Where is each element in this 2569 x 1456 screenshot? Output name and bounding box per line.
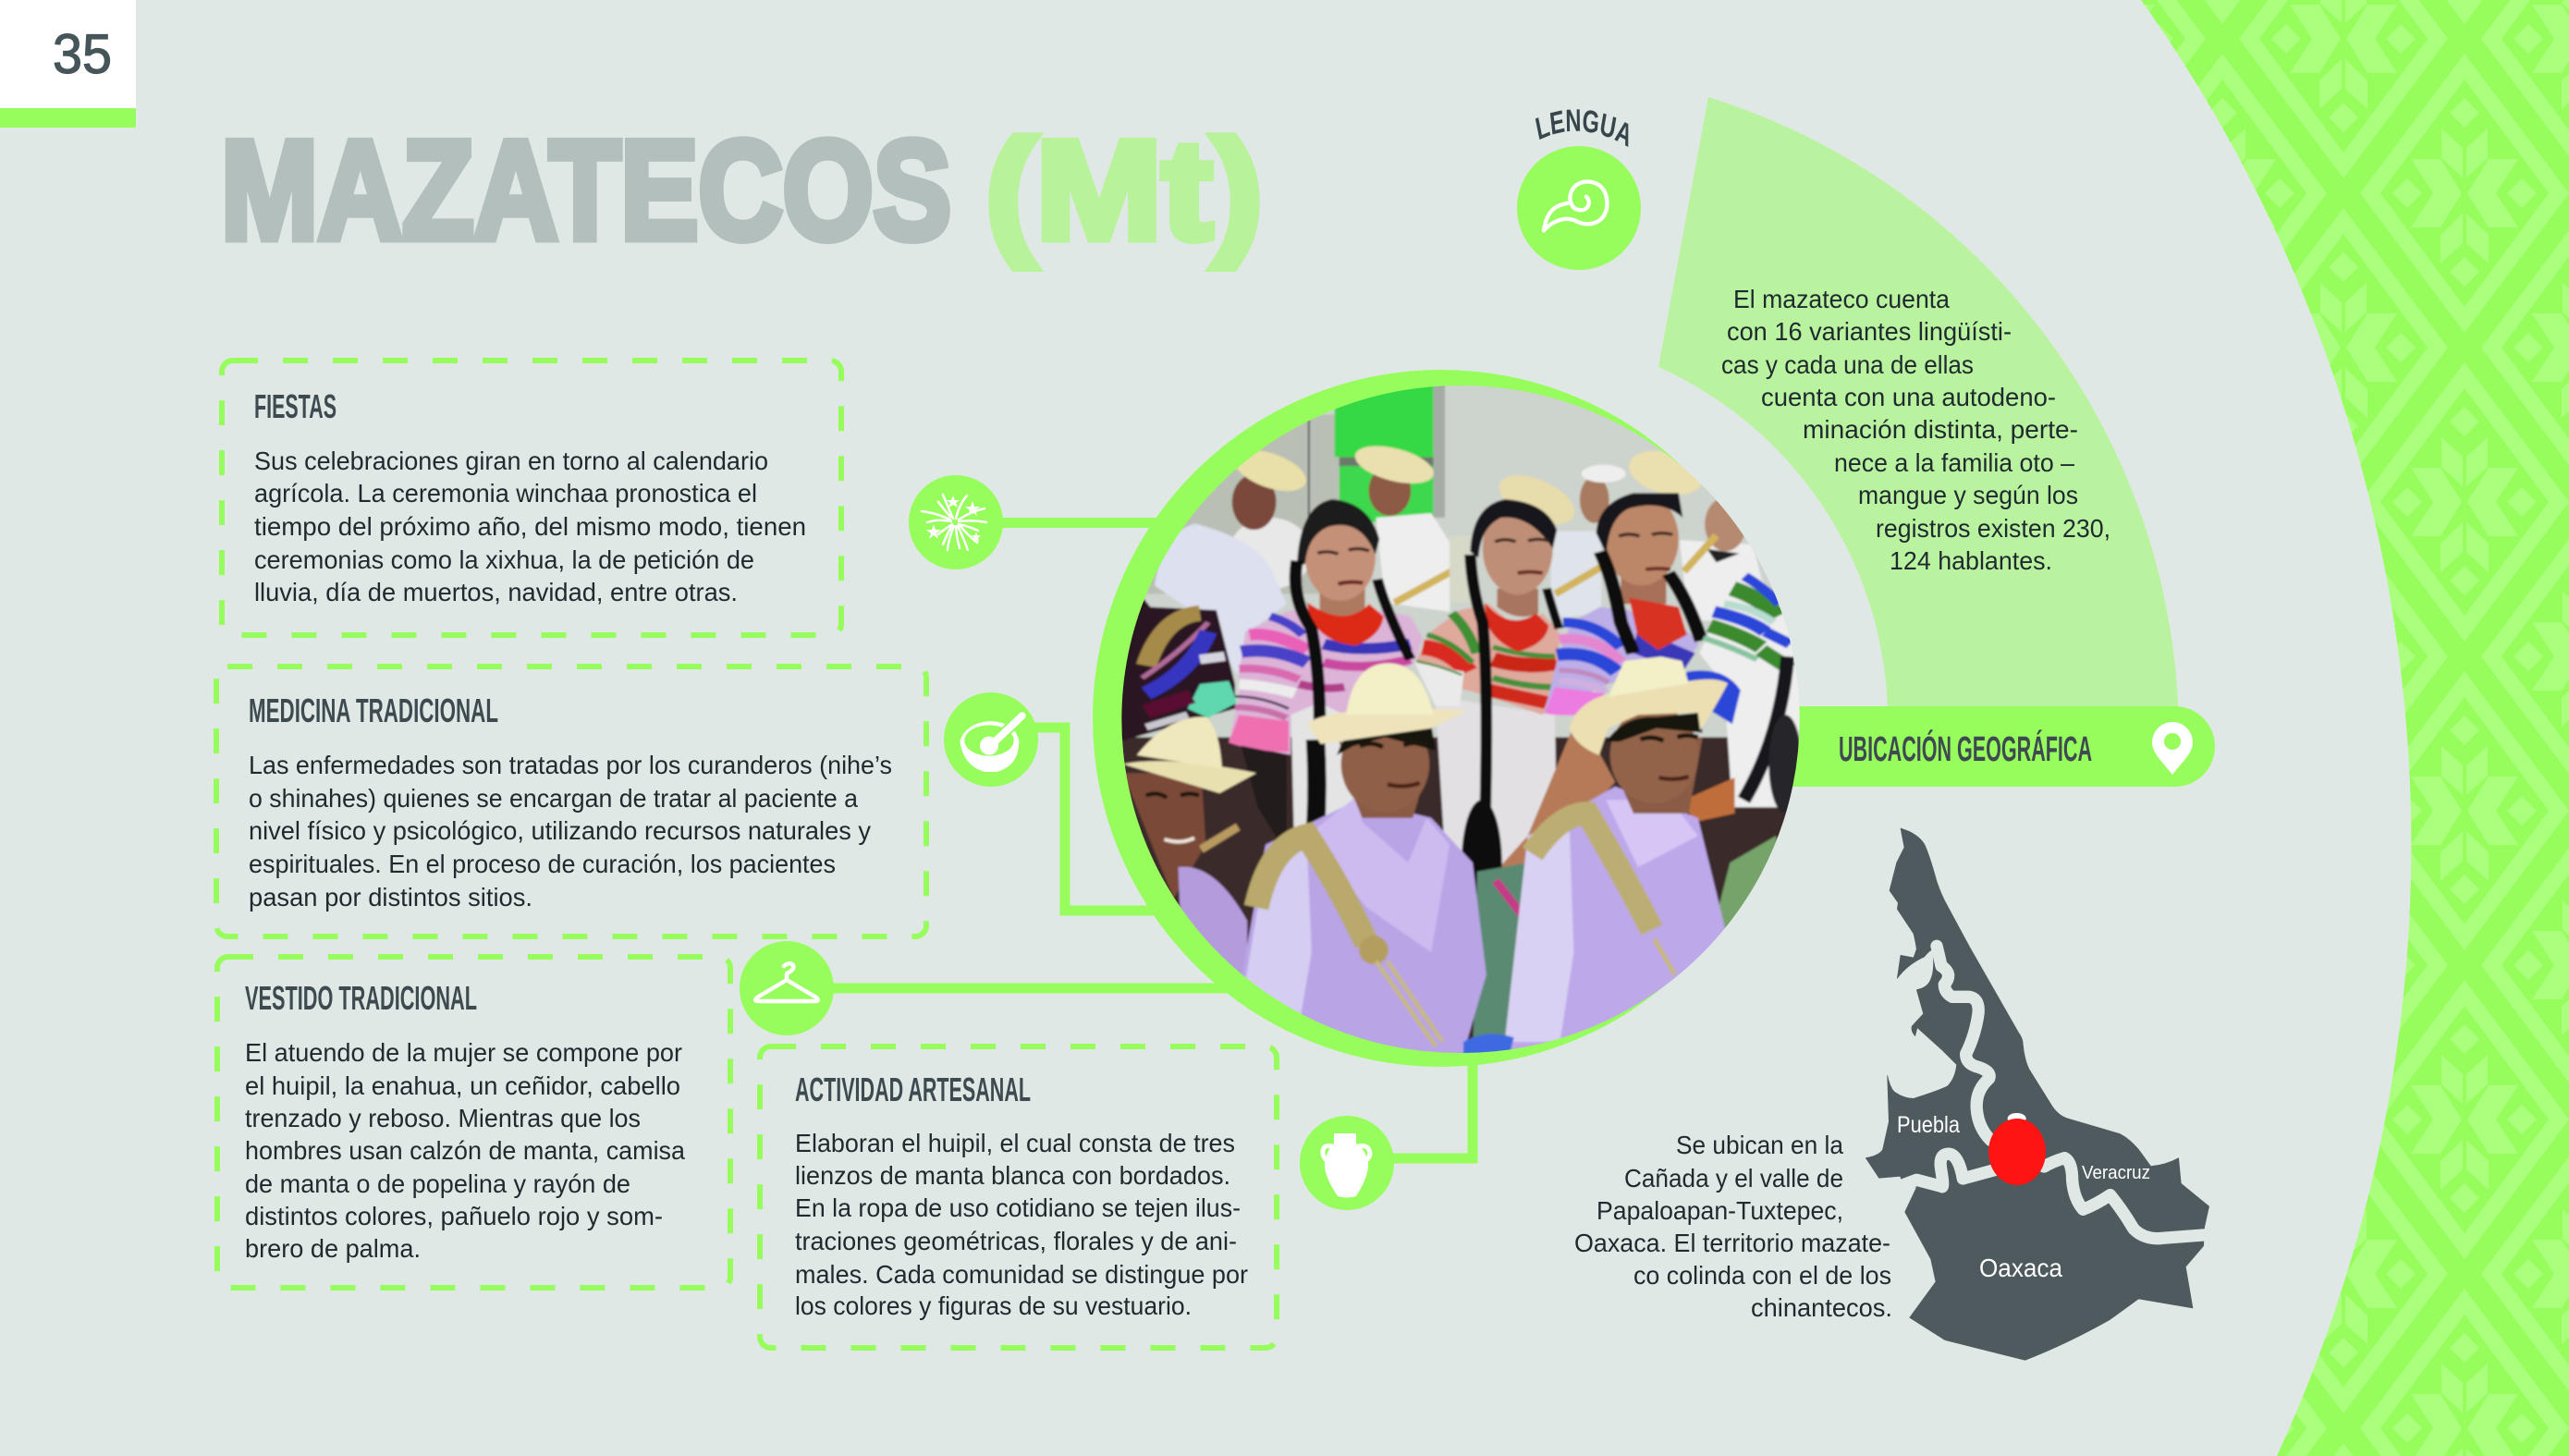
text: fiestas body: lluvia, día de muertos, navidad, entre otras.	[254, 578, 738, 606]
text: fiestas body: ceremonias como la xixhua, la de petición de	[254, 545, 754, 574]
text: actividad body: males. Cada comunidad se distingue por	[795, 1260, 1248, 1289]
lengua text: mangue y según los	[1858, 481, 2078, 509]
lengua text: registros existen 230,	[1876, 514, 2110, 543]
text: actividad body: los colores y figuras de su vestuario.	[795, 1291, 1192, 1320]
panel: actividad artesanal	[760, 1046, 1277, 1348]
photo ring	[1093, 370, 1790, 1067]
lengua text: minación distinta, perte-	[1803, 415, 2078, 444]
lengua text: con 16 variantes lingüísti-	[1727, 317, 2012, 346]
river	[1895, 946, 2212, 1239]
page number tab: 35	[53, 23, 112, 85]
text: medicina body: nivel físico y psicológico, utilizando recursos naturales y	[249, 816, 871, 845]
lengua text: cuenta con una autodeno-	[1761, 383, 2056, 411]
text: actividad body: En la ropa de uso cotidiano se tejen ilus-	[795, 1193, 1241, 1222]
lengua text	[1721, 285, 2110, 575]
text: location description: Se ubican en la	[1676, 1131, 1843, 1159]
marker: red location	[1988, 1119, 2046, 1185]
woman left	[1291, 705, 1355, 828]
curved label: lengua	[1535, 109, 1629, 147]
text: actividad body: lienzos de manta blanca con bordados.	[795, 1161, 1230, 1190]
connectors	[827, 523, 1473, 1158]
ubicación geográfica pill	[1738, 706, 2215, 787]
text: medicina body: Las enfermedades son tratadas por los curanderos (nihe’s	[249, 751, 892, 779]
text: vestido body: distintos colores, pañuelo rojo y som-	[245, 1202, 663, 1230]
panel: lengua sector	[1658, 97, 2179, 730]
text: medicina body	[249, 751, 892, 912]
text: vestido body: hombres usan calzón de manta, camisa	[245, 1136, 685, 1165]
map silhouette	[1866, 828, 2209, 1360]
heading: fiestas: FIESTAS	[254, 387, 336, 425]
woman middle	[1436, 701, 1558, 865]
text: vestido body: de manta o de popelina y rayón de	[245, 1169, 630, 1198]
icon: fireworks	[909, 475, 1003, 569]
panel: medicina tradicional	[216, 667, 926, 936]
icon: clay jug	[1300, 1116, 1394, 1210]
heading: actividad: ACTIVIDAD ARTESANAL	[795, 1071, 1031, 1108]
women row: blouses, faces and braids	[1121, 492, 1800, 865]
text: location description: Cañada y el valle de	[1624, 1164, 1843, 1193]
panel: vestido tradicional	[217, 957, 730, 1288]
title: (Mt)	[985, 112, 1263, 269]
woman right and sleeve	[1545, 607, 1699, 712]
text: location description	[1574, 1131, 1892, 1322]
text: actividad body	[795, 1129, 1248, 1320]
background textile pattern band	[2034, 0, 2569, 1456]
text: location description: chinantecos.	[1751, 1293, 1892, 1322]
icon: mortar and pestle	[944, 692, 1038, 787]
heading: vestido: VESTIDO TRADICIONAL	[245, 979, 477, 1017]
map of mazatec territory	[1866, 828, 2212, 1360]
page number tab	[0, 0, 136, 128]
icon: speech swirl	[1517, 146, 1641, 270]
photo: mazatec group in traditional dress	[1121, 385, 1800, 1054]
map of mazatec territory: Veracruz	[2082, 1163, 2150, 1183]
text: location description: co colinda con el de los	[1633, 1261, 1891, 1290]
map of mazatec territory: Puebla	[1897, 1112, 1960, 1138]
text: vestido body: brero de palma.	[245, 1234, 421, 1263]
text: fiestas body: tiempo del próximo año, del mismo modo, tienen	[254, 512, 806, 541]
text: fiestas body	[254, 447, 806, 606]
text: medicina body: espirituales. En el proceso de curación, los pacientes	[249, 850, 836, 878]
curved label: lengua: LENGUA	[1535, 109, 1629, 147]
text: location description: Papaloapan-Tuxtepec,	[1596, 1196, 1843, 1225]
text: actividad body: traciones geométricas, florales y de ani-	[795, 1227, 1237, 1255]
text: medicina body: pasan por distintos sitios.	[249, 883, 532, 912]
lengua heading and icon	[1517, 109, 1641, 270]
title: MAZATECOS	[221, 112, 951, 269]
text: location description: Oaxaca. El territorio mazate-	[1574, 1229, 1890, 1257]
icon: hanger	[740, 941, 834, 1035]
icon: location pin	[2152, 722, 2193, 775]
ubicación geográfica pill: UBICACIÓN GEOGRÁFICA	[1839, 728, 2092, 769]
text: medicina body: o shinahes) quienes se encargan de tratar al paciente a	[249, 784, 858, 813]
text: vestido body: el huipil, la enahua, un ceñidor, cabello	[245, 1071, 680, 1100]
text: vestido body	[245, 1038, 685, 1263]
lengua text: El mazateco cuenta	[1733, 285, 1950, 313]
text: fiestas body: Sus celebraciones giran en torno al calendario	[254, 447, 768, 475]
map of mazatec territory: Oaxaca	[1979, 1254, 2062, 1282]
lengua text: nece a la familia oto –	[1834, 448, 2074, 477]
text: fiestas body: agrícola. La ceremonia winchaa pronostica el	[254, 479, 757, 508]
text: vestido body: El atuendo de la mujer se compone por	[245, 1038, 682, 1067]
lengua text: 124 hablantes.	[1890, 546, 2052, 575]
text: vestido body: trenzado y reboso. Mientras que los	[245, 1104, 641, 1132]
panel: fiestas	[222, 361, 841, 635]
heading: medicina: MEDICINA TRADICIONAL	[249, 691, 498, 729]
text: actividad body: Elaboran el huipil, el cual consta de tres	[795, 1129, 1235, 1157]
lengua text: cas y cada una de ellas	[1721, 350, 1974, 379]
